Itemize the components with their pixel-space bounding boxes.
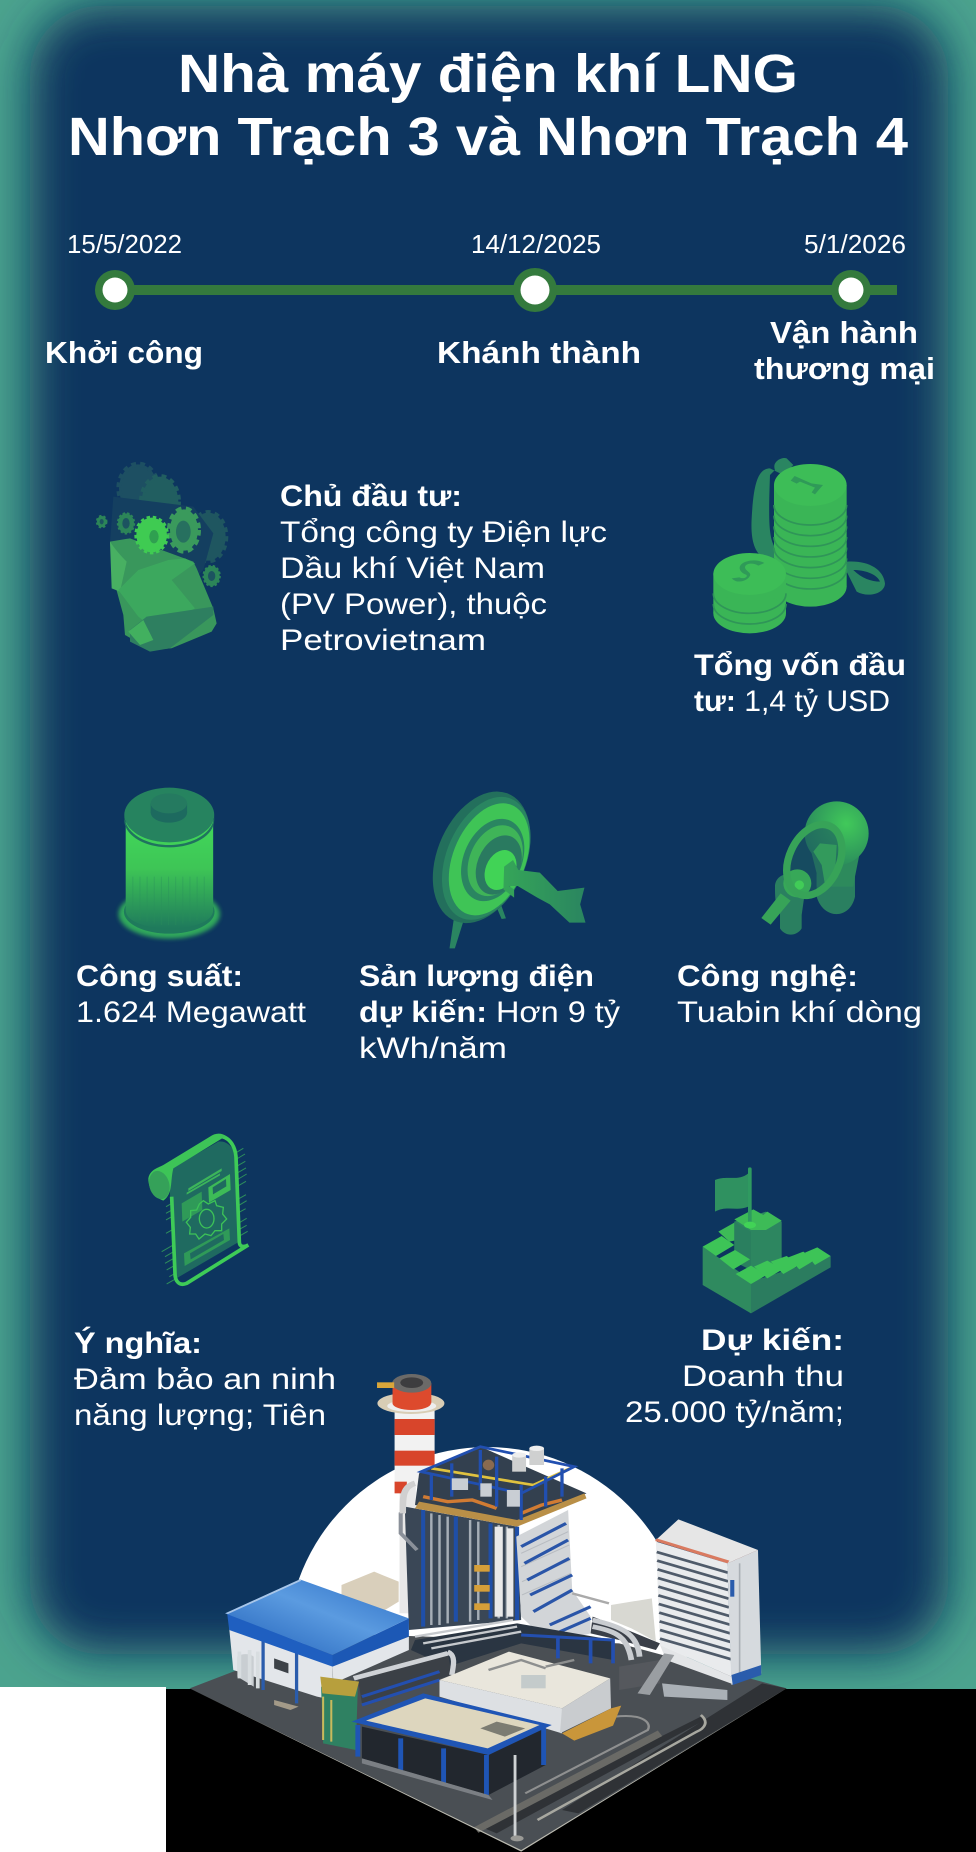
title — [68, 44, 908, 167]
milestone: van hanh thuong mai — [754, 229, 935, 386]
power plant illustration — [190, 1374, 787, 1852]
stairs, lamp and site detail — [511, 1653, 727, 1841]
icon: castle steps with flag — [703, 1167, 831, 1313]
milestone: khanh thanh — [437, 229, 641, 370]
panel: y nghia — [74, 1326, 336, 1432]
milestone: khoi cong: 15/5/2022 — [67, 229, 182, 259]
panel: cong suat: Công suất: — [76, 960, 243, 993]
panel: du kien: Doanh thu — [682, 1360, 844, 1393]
panel: y nghia: Đảm bảo an ninh — [74, 1363, 336, 1396]
cooling units behind — [341, 1572, 399, 1612]
panel: tong von dau tu: Tổng vốn đầu — [694, 649, 906, 682]
milestone: khoi cong: Khởi công — [45, 335, 203, 370]
panel: cong suat — [76, 960, 307, 1029]
panel: chu dau tu: Petrovietnam — [280, 624, 486, 657]
panel: tong von dau tu — [694, 649, 906, 718]
panel: chu dau tu: Chủ đầu tư: — [280, 480, 462, 513]
panel: du kien: 25.000 tỷ/năm; — [625, 1396, 844, 1429]
boiler tower front — [401, 1483, 521, 1630]
panel: y nghia: Ý nghĩa: — [74, 1326, 202, 1360]
panel: y nghia: năng lượng; Tiên — [74, 1399, 326, 1432]
blue roof building — [225, 1579, 409, 1710]
panel: cong suat: 1.624 Megawatt — [76, 996, 307, 1029]
panel: du kien — [625, 1324, 844, 1429]
hrsg right face — [516, 1510, 591, 1643]
icon: head with gears — [97, 464, 226, 652]
panel: san luong dien: kWh/năm — [359, 1032, 507, 1065]
panel: chu dau tu: Tổng công ty Điện lực — [280, 516, 607, 549]
milestone: khanh thanh: 14/12/2025 — [471, 229, 601, 259]
panel: san luong dien: Sản lượng điện — [359, 960, 594, 993]
milestone: van hanh thuong mai: Vận hành — [770, 315, 918, 350]
pipe rack — [354, 1620, 613, 1705]
icon: bulb with magnifier — [761, 801, 869, 935]
milestone: van hanh thuong mai: 5/1/2026 — [804, 229, 906, 259]
icon: target with arrow — [415, 779, 586, 948]
panel: san luong dien: dự kiến: Hơn 9 tỷ — [359, 996, 620, 1029]
panel: cong nghe: Tuabin khí dòng — [677, 996, 922, 1029]
panel: cong nghe: Công nghệ: — [677, 960, 858, 993]
title: Nhà máy điện khí LNG — [178, 44, 798, 104]
milestone: van hanh thuong mai: thương mại — [754, 351, 935, 386]
panel: chu dau tu: Dầu khí Việt Nam — [280, 552, 545, 585]
icon: coin stacks — [713, 458, 885, 633]
top frame of tower — [415, 1446, 586, 1527]
timeline — [45, 229, 935, 386]
panel: tong von dau tu: tư: 1,4 tỷ USD — [694, 685, 890, 718]
white container block — [439, 1652, 621, 1741]
panel: cong nghe — [677, 960, 922, 1029]
milestone: khoi cong — [45, 229, 203, 370]
panel: chu dau tu: (PV Power), thuộc — [280, 588, 547, 621]
panel: du kien: Dự kiến: — [701, 1324, 844, 1357]
right ducts — [572, 1593, 660, 1690]
striped cooling building — [655, 1519, 761, 1685]
white dome behind plant — [290, 1447, 687, 1657]
blue canopy building — [352, 1693, 552, 1800]
green tank — [320, 1677, 359, 1750]
title: Nhơn Trạch 3 và Nhơn Trạch 4 — [68, 107, 908, 167]
milestone: khanh thanh: Khánh thành — [437, 335, 641, 370]
panel: chu dau tu — [280, 480, 607, 657]
icon: blueprint scroll — [146, 1134, 248, 1284]
chimney — [377, 1374, 444, 1613]
panel: san luong dien — [359, 960, 620, 1065]
icon: battery — [119, 788, 220, 939]
ground plate — [190, 1633, 787, 1850]
